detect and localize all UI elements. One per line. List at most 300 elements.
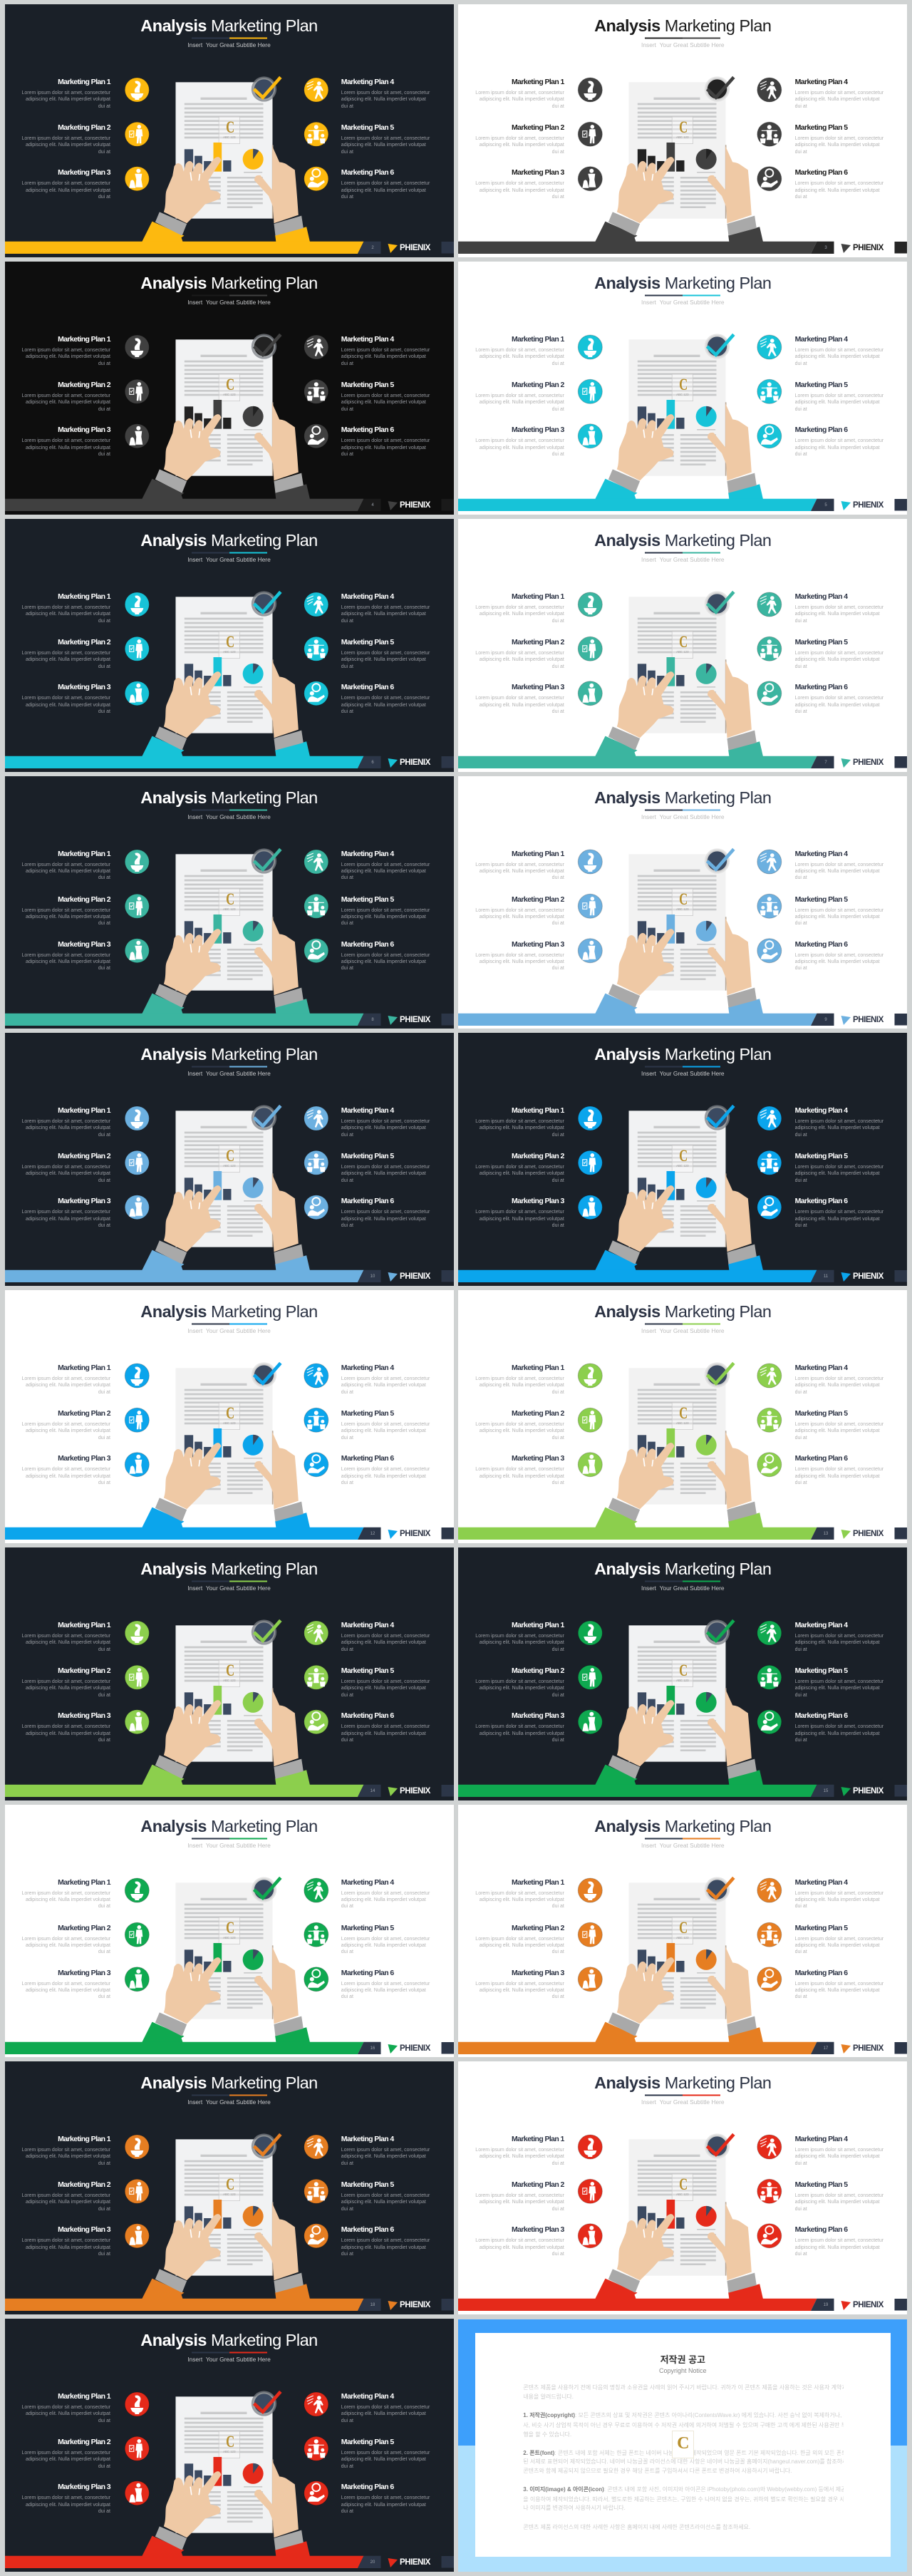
plan 5 bbox=[795, 637, 889, 670]
plan 3: adipiscing elit. Nulla imperdiet volutpat bbox=[26, 1217, 110, 1222]
document with hands bbox=[595, 1362, 763, 1528]
plan 2: Marketing Plan 2 bbox=[58, 1666, 110, 1675]
plan 3: Lorem ipsum dolor sit amet, consectetur bbox=[21, 1724, 110, 1729]
plan 1: Marketing Plan 1 bbox=[58, 2135, 110, 2143]
plan 1: Lorem ipsum dolor sit amet, consectetur bbox=[21, 2405, 110, 2410]
plan 3 bbox=[21, 168, 111, 200]
notice subtitle: Copyright Notice bbox=[659, 2366, 707, 2374]
icon: plan 5 bbox=[757, 637, 782, 661]
plan 6: Lorem ipsum dolor sit amet, consectetur bbox=[341, 696, 430, 701]
plan 4 bbox=[341, 2391, 435, 2424]
subtitle: Insert Your Great Subtitle Here bbox=[641, 41, 725, 48]
plan 3 bbox=[16, 2482, 110, 2515]
plan 2: Lorem ipsum dolor sit amet, consectetur bbox=[475, 393, 564, 398]
plan 2 bbox=[470, 1666, 564, 1699]
plan 1: Marketing Plan 1 bbox=[512, 2135, 564, 2143]
icon: plan 1 bbox=[125, 1877, 149, 1902]
plan 5: Marketing Plan 5 bbox=[341, 123, 394, 132]
plan 4: Marketing Plan 4 bbox=[341, 1621, 394, 1629]
icon: plan 5 bbox=[304, 2436, 328, 2461]
plan 4: dui at bbox=[341, 2418, 353, 2423]
plan 6: Lorem ipsum dolor sit amet, consectetur bbox=[341, 438, 430, 443]
icon: plan 4 bbox=[304, 1106, 328, 1130]
plan 3 bbox=[21, 683, 111, 714]
plan 4: adipiscing elit. Nulla imperdiet volutpat bbox=[341, 1897, 426, 1902]
plan 1: Lorem ipsum dolor sit amet, consectetur bbox=[21, 2148, 110, 2153]
plan 6: adipiscing elit. Nulla imperdiet volutpat bbox=[341, 2245, 426, 2250]
title: Analysis Marketing Plan bbox=[594, 788, 772, 807]
plan 4: Marketing Plan 4 bbox=[341, 78, 394, 86]
plan 1: Lorem ipsum dolor sit amet, consectetur bbox=[21, 1119, 110, 1124]
plan 5: dui at bbox=[795, 921, 807, 926]
icon: plan 5 bbox=[304, 122, 328, 146]
plan 6: Marketing Plan 6 bbox=[341, 1969, 394, 1977]
plan 6: adipiscing elit. Nulla imperdiet volutpat bbox=[795, 1731, 880, 1736]
plan 2: adipiscing elit. Nulla imperdiet volutpat bbox=[480, 400, 564, 405]
plan 4: dui at bbox=[795, 361, 807, 366]
plan 5: Lorem ipsum dolor sit amet, consectetur bbox=[341, 651, 430, 656]
plan 6: dui at bbox=[795, 195, 807, 200]
plan 6: adipiscing elit. Nulla imperdiet volutpat bbox=[795, 188, 880, 193]
plan 2: Lorem ipsum dolor sit amet, consectetur bbox=[475, 136, 564, 141]
plan 3 bbox=[470, 1711, 564, 1743]
plan 5: Marketing Plan 5 bbox=[341, 1923, 394, 1932]
plan 2: dui at bbox=[552, 150, 564, 155]
footer bbox=[4, 2041, 453, 2054]
icon: plan 1 bbox=[579, 335, 603, 359]
icon: plan 3 bbox=[125, 167, 149, 191]
plan 6: Lorem ipsum dolor sit amet, consectetur bbox=[795, 2238, 884, 2243]
icon: plan 2 bbox=[579, 637, 603, 661]
plan 2: Lorem ipsum dolor sit amet, consectetur bbox=[21, 393, 110, 398]
plan 1: Lorem ipsum dolor sit amet, consectetur bbox=[475, 1119, 564, 1124]
plan 1: Lorem ipsum dolor sit amet, consectetur bbox=[475, 1890, 564, 1896]
plan 5: Lorem ipsum dolor sit amet, consectetur bbox=[341, 1679, 430, 1684]
plan 4: adipiscing elit. Nulla imperdiet volutpat bbox=[795, 1383, 880, 1388]
plan 3: Marketing Plan 3 bbox=[512, 426, 564, 434]
plan 6: dui at bbox=[341, 966, 353, 971]
footer: 12 bbox=[370, 1532, 375, 1536]
plan 5: dui at bbox=[341, 407, 353, 412]
plan 2: dui at bbox=[98, 921, 110, 926]
plan 3: Lorem ipsum dolor sit amet, consectetur bbox=[21, 1210, 110, 1215]
plan 3 bbox=[475, 426, 564, 457]
plan 6 bbox=[341, 426, 430, 457]
title: Analysis Marketing Plan bbox=[594, 531, 772, 550]
plan 3: Marketing Plan 3 bbox=[58, 1197, 110, 1205]
plan 4: dui at bbox=[795, 1133, 807, 1138]
icon: plan 1 bbox=[579, 850, 603, 874]
footer bbox=[4, 1013, 453, 1025]
plan 5: dui at bbox=[341, 1436, 353, 1441]
document with hands bbox=[141, 76, 310, 242]
plan 6: Marketing Plan 6 bbox=[795, 1969, 847, 1977]
plan 3: Marketing Plan 3 bbox=[58, 940, 110, 949]
plan 4: Lorem ipsum dolor sit amet, consectetur bbox=[795, 348, 884, 353]
notice body text bbox=[458, 2319, 907, 2572]
plan 2 bbox=[16, 2437, 110, 2470]
plan 2: dui at bbox=[98, 2464, 110, 2469]
plan 2: Marketing Plan 2 bbox=[58, 638, 110, 646]
slide artwork bbox=[458, 1805, 907, 2057]
plan 4: adipiscing elit. Nulla imperdiet volutpat bbox=[341, 97, 426, 102]
plan 2: dui at bbox=[552, 921, 564, 926]
plan 2 bbox=[16, 2180, 110, 2212]
plan 6: adipiscing elit. Nulla imperdiet volutpat bbox=[341, 2503, 426, 2508]
title: Analysis Marketing Plan bbox=[594, 1816, 772, 1835]
panel: slide 10 dark light blue bbox=[4, 1033, 453, 1286]
document with hands bbox=[595, 2133, 763, 2299]
plan 4: adipiscing elit. Nulla imperdiet volutpat bbox=[795, 612, 880, 617]
plan 6 bbox=[795, 682, 889, 715]
plan 2: adipiscing elit. Nulla imperdiet volutpat bbox=[26, 143, 110, 148]
plan 1: dui at bbox=[552, 1904, 564, 1909]
plan 2: Marketing Plan 2 bbox=[58, 123, 110, 132]
plan 5: adipiscing elit. Nulla imperdiet volutpat bbox=[795, 1171, 880, 1176]
subtitle: Insert Your Great Subtitle Here bbox=[641, 1327, 725, 1334]
footer: PHIENIX bbox=[399, 2557, 430, 2567]
footer: 5 bbox=[825, 503, 828, 508]
plan 2 bbox=[16, 894, 110, 927]
notice body text: 내용을 알려드립니다. bbox=[523, 2394, 574, 2400]
plan 1: adipiscing elit. Nulla imperdiet volutpat bbox=[480, 1897, 564, 1902]
plan 2: Marketing Plan 2 bbox=[512, 381, 564, 389]
plan 6: adipiscing elit. Nulla imperdiet volutpat bbox=[341, 188, 426, 193]
plan 2 bbox=[16, 1666, 110, 1699]
slide artwork bbox=[4, 1547, 453, 1800]
icon: plan 6 bbox=[304, 424, 328, 448]
icon: plan 5 bbox=[304, 1150, 328, 1175]
plan 1 bbox=[475, 335, 564, 366]
plan 6: adipiscing elit. Nulla imperdiet volutpat bbox=[341, 959, 426, 964]
plan 4 bbox=[341, 1106, 435, 1138]
plan 6: adipiscing elit. Nulla imperdiet volutpat bbox=[341, 1217, 426, 1222]
plan 4 bbox=[341, 78, 430, 109]
plan 1: Marketing Plan 1 bbox=[58, 850, 110, 858]
plan 6 bbox=[341, 1968, 435, 2001]
plan 4 bbox=[341, 592, 430, 624]
plan 3: adipiscing elit. Nulla imperdiet volutpat bbox=[26, 1474, 110, 1479]
plan 5: adipiscing elit. Nulla imperdiet volutpat bbox=[341, 400, 426, 405]
plan 1: Marketing Plan 1 bbox=[58, 592, 110, 601]
icon: plan 6 bbox=[757, 681, 782, 706]
footer: 8 bbox=[371, 1018, 374, 1022]
footer bbox=[4, 2299, 453, 2311]
plan 3 bbox=[470, 1968, 564, 2001]
plan 2: Lorem ipsum dolor sit amet, consectetur bbox=[475, 1422, 564, 1427]
plan 3: dui at bbox=[98, 709, 110, 714]
subtitle: Insert Your Great Subtitle Here bbox=[187, 299, 271, 306]
icon: plan 1 bbox=[125, 1106, 149, 1130]
plan 2: adipiscing elit. Nulla imperdiet volutpat bbox=[26, 400, 110, 405]
slide artwork bbox=[4, 1805, 453, 2057]
plan 4: Marketing Plan 4 bbox=[341, 2392, 394, 2401]
plan 4: adipiscing elit. Nulla imperdiet volutpat bbox=[795, 1897, 880, 1902]
plan 5 bbox=[341, 381, 430, 412]
plan 3: adipiscing elit. Nulla imperdiet volutpat bbox=[26, 959, 110, 964]
plan 2: Marketing Plan 2 bbox=[58, 895, 110, 904]
plan 6 bbox=[341, 683, 430, 714]
icon: plan 6 bbox=[304, 1453, 328, 1477]
plan 5: dui at bbox=[341, 664, 353, 669]
subtitle: Insert Your Great Subtitle Here bbox=[641, 1070, 725, 1077]
plan 1: dui at bbox=[552, 619, 564, 624]
plan 1: dui at bbox=[552, 1647, 564, 1652]
slide artwork bbox=[5, 552, 454, 768]
icon: plan 1 bbox=[125, 1621, 149, 1645]
plan 3: dui at bbox=[552, 1223, 564, 1228]
plan 3: dui at bbox=[98, 1223, 110, 1228]
icon: plan 4 bbox=[304, 1877, 328, 1902]
plan 3: adipiscing elit. Nulla imperdiet volutpat bbox=[480, 445, 564, 450]
plan 6: dui at bbox=[341, 709, 353, 714]
subtitle: Insert Your Great Subtitle Here bbox=[641, 813, 725, 820]
icon: plan 1 bbox=[579, 1877, 603, 1902]
subtitle: Insert Your Great Subtitle Here bbox=[641, 1842, 725, 1849]
plan 2: dui at bbox=[552, 664, 564, 669]
plan 4: adipiscing elit. Nulla imperdiet volutpat bbox=[341, 612, 426, 617]
plan 4 bbox=[341, 848, 435, 881]
plan 6: dui at bbox=[795, 2252, 807, 2257]
icon: plan 3 bbox=[579, 1453, 603, 1477]
plan 1: dui at bbox=[98, 1647, 110, 1652]
plan 4: Lorem ipsum dolor sit amet, consectetur bbox=[341, 862, 430, 867]
document with hands bbox=[595, 1105, 763, 1271]
plan 6: Lorem ipsum dolor sit amet, consectetur bbox=[795, 1467, 884, 1472]
white notice card bbox=[475, 2332, 891, 2556]
plan 5 bbox=[795, 2180, 889, 2212]
subtitle: Insert Your Great Subtitle Here bbox=[187, 1327, 271, 1334]
plan 1 bbox=[470, 1106, 564, 1138]
plan 4: dui at bbox=[795, 875, 807, 880]
slide artwork bbox=[4, 1033, 453, 1286]
plan 4: Lorem ipsum dolor sit amet, consectetur bbox=[341, 1890, 430, 1896]
plan 5: adipiscing elit. Nulla imperdiet volutpat bbox=[341, 2457, 426, 2462]
footer: 7 bbox=[825, 761, 828, 765]
plan 2: dui at bbox=[98, 407, 110, 412]
icon: plan 3 bbox=[125, 938, 149, 962]
plan 3: Marketing Plan 3 bbox=[512, 940, 564, 949]
plan 1: Marketing Plan 1 bbox=[512, 592, 564, 601]
plan 6 bbox=[795, 426, 884, 457]
icon: plan 3 bbox=[579, 938, 603, 962]
icon: plan 6 bbox=[757, 1967, 782, 1991]
plan 3: Marketing Plan 3 bbox=[512, 1454, 564, 1463]
plan 1: dui at bbox=[552, 2161, 564, 2166]
plan 1 bbox=[475, 78, 564, 109]
plan 5 bbox=[341, 2180, 435, 2212]
footer: PHIENIX bbox=[853, 758, 884, 767]
plan 6: Marketing Plan 6 bbox=[341, 1454, 394, 1463]
plan 3: Marketing Plan 3 bbox=[58, 1454, 110, 1463]
plan 2: dui at bbox=[98, 1178, 110, 1183]
title: Analysis Marketing Plan bbox=[594, 1560, 772, 1578]
plan 4: dui at bbox=[341, 2161, 353, 2166]
icon: plan 6 bbox=[304, 167, 328, 191]
plan 4: dui at bbox=[795, 1390, 807, 1395]
icon: plan 2 bbox=[579, 2179, 603, 2203]
subtitle: Insert Your Great Subtitle Here bbox=[641, 2098, 725, 2106]
plan 1: adipiscing elit. Nulla imperdiet volutpat bbox=[26, 612, 110, 617]
notice body text: 나 이미지를 변경하여 사용하시기 바랍니다. bbox=[523, 2505, 626, 2511]
plan 5: adipiscing elit. Nulla imperdiet volutpat bbox=[341, 657, 426, 662]
plan 2: adipiscing elit. Nulla imperdiet volutpat bbox=[480, 1171, 564, 1176]
plan 5: dui at bbox=[795, 1693, 807, 1698]
plan 3: dui at bbox=[552, 966, 564, 971]
plan 1: dui at bbox=[98, 2161, 110, 2166]
footer bbox=[4, 1270, 453, 1282]
title: Analysis Marketing Plan bbox=[594, 1302, 772, 1321]
icon: plan 3 bbox=[125, 681, 149, 706]
plan 2: adipiscing elit. Nulla imperdiet volutpat bbox=[480, 1686, 564, 1691]
plan 2: Lorem ipsum dolor sit amet, consectetur bbox=[21, 1165, 110, 1170]
document with hands bbox=[141, 1619, 310, 1786]
plan 2: Marketing Plan 2 bbox=[58, 2438, 110, 2446]
icon: plan 4 bbox=[757, 1106, 782, 1130]
title: Analysis Marketing Plan bbox=[140, 1045, 318, 1063]
plan 6: Lorem ipsum dolor sit amet, consectetur bbox=[795, 953, 884, 958]
panel: slide 13 white green bbox=[458, 1290, 907, 1542]
plan 1: Lorem ipsum dolor sit amet, consectetur bbox=[475, 862, 564, 867]
plan 3: adipiscing elit. Nulla imperdiet volutpat bbox=[26, 2245, 110, 2250]
plan 5: dui at bbox=[795, 150, 807, 155]
plan 4: adipiscing elit. Nulla imperdiet volutpat bbox=[795, 354, 880, 359]
footer bbox=[458, 1270, 907, 1282]
plan 5: dui at bbox=[341, 1949, 353, 1954]
plan 2: adipiscing elit. Nulla imperdiet volutpat bbox=[480, 657, 564, 662]
plan 6: Lorem ipsum dolor sit amet, consectetur bbox=[341, 2238, 430, 2243]
plan 5 bbox=[341, 1666, 435, 1699]
plan 1: dui at bbox=[98, 361, 110, 366]
footer: PHIENIX bbox=[853, 2043, 884, 2053]
plan 6: adipiscing elit. Nulla imperdiet volutpat bbox=[341, 1731, 426, 1736]
icon: plan 6 bbox=[304, 1195, 328, 1220]
plan 6: Marketing Plan 6 bbox=[341, 426, 394, 434]
plan 6: adipiscing elit. Nulla imperdiet volutpat bbox=[795, 2245, 880, 2250]
plan 1: adipiscing elit. Nulla imperdiet volutpat bbox=[26, 97, 110, 102]
icon: plan 5 bbox=[757, 894, 782, 918]
plan 5: Lorem ipsum dolor sit amet, consectetur bbox=[795, 393, 884, 398]
icon: plan 2 bbox=[125, 1408, 149, 1432]
plan 2: dui at bbox=[98, 2207, 110, 2212]
plan 1 bbox=[16, 2134, 110, 2167]
plan 3: dui at bbox=[98, 1480, 110, 1485]
slide artwork bbox=[458, 1547, 907, 1800]
plan 2: adipiscing elit. Nulla imperdiet volutpat bbox=[480, 1428, 564, 1433]
plan 6: Marketing Plan 6 bbox=[341, 2483, 394, 2491]
footer: PHIENIX bbox=[399, 1786, 430, 1796]
icon: plan 6 bbox=[757, 167, 782, 191]
plan 2: adipiscing elit. Nulla imperdiet volutpat bbox=[26, 2200, 110, 2205]
document with hands bbox=[141, 334, 310, 500]
plan 6: Marketing Plan 6 bbox=[341, 168, 394, 177]
plan 1: dui at bbox=[98, 1390, 110, 1395]
plan 2: Lorem ipsum dolor sit amet, consectetur bbox=[21, 2451, 110, 2456]
plan 1: adipiscing elit. Nulla imperdiet volutpat bbox=[480, 97, 564, 102]
plan 3 bbox=[470, 939, 564, 972]
plan 4: Lorem ipsum dolor sit amet, consectetur bbox=[341, 1119, 430, 1124]
plan 1: dui at bbox=[98, 104, 110, 109]
plan 1: adipiscing elit. Nulla imperdiet volutpat bbox=[26, 354, 110, 359]
plan 2: adipiscing elit. Nulla imperdiet volutpat bbox=[480, 1943, 564, 1948]
panel: slide 11 dark blue bbox=[458, 1033, 907, 1286]
plan 6: adipiscing elit. Nulla imperdiet volutpat bbox=[341, 1988, 426, 1993]
plan 5: Marketing Plan 5 bbox=[795, 638, 847, 646]
plan 6 bbox=[341, 1711, 435, 1743]
plan 5: adipiscing elit. Nulla imperdiet volutpat bbox=[795, 1428, 880, 1433]
icon: plan 4 bbox=[757, 592, 782, 617]
plan 3: Lorem ipsum dolor sit amet, consectetur bbox=[475, 1467, 564, 1472]
icon: plan 3 bbox=[125, 2224, 149, 2248]
plan 1 bbox=[16, 1620, 110, 1653]
plan 6: dui at bbox=[341, 2252, 353, 2257]
document with hands bbox=[595, 334, 763, 500]
title: Analysis Marketing Plan bbox=[140, 2073, 318, 2092]
plan 3: dui at bbox=[98, 2252, 110, 2257]
footer bbox=[458, 2041, 907, 2054]
plan 5: dui at bbox=[795, 1178, 807, 1183]
plan 5: dui at bbox=[341, 1693, 353, 1698]
footer: 3 bbox=[825, 246, 828, 250]
plan 1: Lorem ipsum dolor sit amet, consectetur bbox=[475, 2148, 564, 2153]
plan 4: Lorem ipsum dolor sit amet, consectetur bbox=[341, 91, 430, 96]
plan 1: dui at bbox=[98, 1904, 110, 1909]
plan 5: adipiscing elit. Nulla imperdiet volutpat bbox=[341, 1171, 426, 1176]
plan 5 bbox=[341, 123, 430, 155]
plan 2: Lorem ipsum dolor sit amet, consectetur bbox=[475, 1165, 564, 1170]
footer bbox=[4, 242, 453, 254]
plan 1: Lorem ipsum dolor sit amet, consectetur bbox=[475, 348, 564, 353]
footer: 4 bbox=[371, 503, 374, 508]
plan 4: adipiscing elit. Nulla imperdiet volutpat bbox=[795, 869, 880, 874]
panel: slide 2 dark yellow bbox=[4, 4, 453, 257]
plan 6: Marketing Plan 6 bbox=[341, 940, 394, 949]
plan 2 bbox=[470, 637, 564, 670]
plan 5 bbox=[795, 1666, 889, 1699]
plan 4 bbox=[795, 1620, 889, 1653]
plan 1: Marketing Plan 1 bbox=[58, 335, 110, 344]
plan 6 bbox=[795, 168, 884, 200]
plan 3: Lorem ipsum dolor sit amet, consectetur bbox=[21, 696, 110, 701]
icon: plan 1 bbox=[125, 850, 149, 874]
plan 3: adipiscing elit. Nulla imperdiet volutpat bbox=[480, 1988, 564, 1993]
plan 2: Marketing Plan 2 bbox=[512, 638, 564, 646]
plan 2: dui at bbox=[552, 1178, 564, 1183]
icon: plan 4 bbox=[304, 592, 328, 617]
icon: plan 4 bbox=[304, 1364, 328, 1388]
icon: plan 6 bbox=[757, 424, 782, 448]
icon: plan 1 bbox=[125, 2392, 149, 2416]
plan 1: Marketing Plan 1 bbox=[58, 1877, 110, 1886]
icon: plan 6 bbox=[757, 1710, 782, 1734]
plan 1: dui at bbox=[552, 875, 564, 880]
plan 4: adipiscing elit. Nulla imperdiet volutpat bbox=[341, 354, 426, 359]
plan 3 bbox=[470, 2225, 564, 2257]
plan 6: dui at bbox=[795, 1480, 807, 1485]
icon: plan 5 bbox=[304, 379, 328, 403]
panel: slide 15 dark emerald bbox=[458, 1547, 907, 1800]
title: Analysis Marketing Plan bbox=[594, 1045, 772, 1063]
plan 1: Lorem ipsum dolor sit amet, consectetur bbox=[21, 1634, 110, 1639]
gold C stamp bbox=[672, 2431, 694, 2458]
plan 1: adipiscing elit. Nulla imperdiet volutpat bbox=[480, 612, 564, 617]
icon: plan 1 bbox=[125, 335, 149, 359]
footer: PHIENIX bbox=[399, 758, 430, 767]
notice title: 저작권 공고 bbox=[660, 2354, 705, 2365]
plan 4 bbox=[341, 1877, 435, 1910]
plan 4: Lorem ipsum dolor sit amet, consectetur bbox=[341, 1376, 430, 1381]
icon: plan 1 bbox=[579, 592, 603, 617]
